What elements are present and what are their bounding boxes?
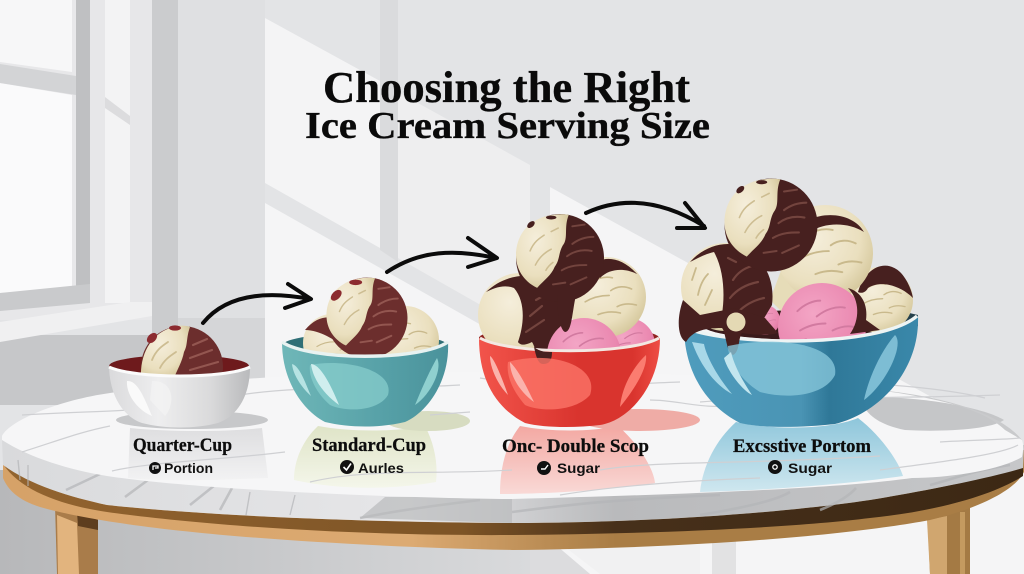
table: legs (55, 505, 970, 574)
label: double scoop (502, 436, 649, 476)
label: quarter-cup: Quarter-Cup (133, 435, 232, 456)
serving 2: standard-cup teal bowl (282, 278, 448, 426)
scoop: top half vanilla half chocolate (724, 178, 818, 272)
icon: portion badge (149, 462, 161, 474)
title: Ice Cream Serving Size (305, 105, 710, 147)
serving 1: quarter-cup white bowl (109, 325, 250, 428)
table: marble top (2, 372, 1023, 499)
window on the left wall (0, 0, 152, 342)
icon: sugar badge (768, 460, 782, 474)
icon: check badge (340, 460, 354, 474)
left scoop with chocolate sauce (681, 243, 773, 331)
left scoop with chocolate sauce (478, 273, 570, 363)
icon: sugar badge (537, 461, 551, 475)
table: wooden rim (3, 450, 1024, 550)
bowl reflections on the table (128, 418, 903, 494)
label: standard-cup: Aurles (358, 460, 404, 476)
wall below the tabletop (0, 470, 736, 574)
arrow: standard-cup to double scoop (387, 238, 497, 272)
label: quarter-cup: Portion (164, 460, 213, 476)
serving 4: excessive portion blue bowl (679, 178, 918, 427)
chocolate sauce drip over the rim (679, 300, 778, 355)
arrow: double scoop to excessive portion (586, 203, 705, 228)
label: standard-cup (312, 435, 426, 476)
label: double scoop: Sugar (557, 460, 601, 476)
label: double scoop: Onc- Double Scop (502, 436, 649, 457)
title: Choosing the Right (323, 63, 690, 112)
bowl shadows on the table (116, 409, 700, 431)
table: marble side edge (2, 440, 1024, 523)
scoop: half vanilla half chocolate (141, 325, 223, 408)
label: excessive portion: Excsstive Portom (733, 436, 871, 457)
scoop: top half vanilla half chocolate (516, 214, 604, 302)
arrow: quarter-cup to standard-cup (203, 284, 311, 323)
label: quarter-cup (133, 435, 232, 476)
serving 3: double scoop red bowl (478, 214, 660, 427)
label: excessive portion: Sugar (788, 460, 833, 476)
label: excessive portion (733, 436, 871, 476)
label: standard-cup: Standard-Cup (312, 435, 426, 456)
title (305, 63, 710, 147)
